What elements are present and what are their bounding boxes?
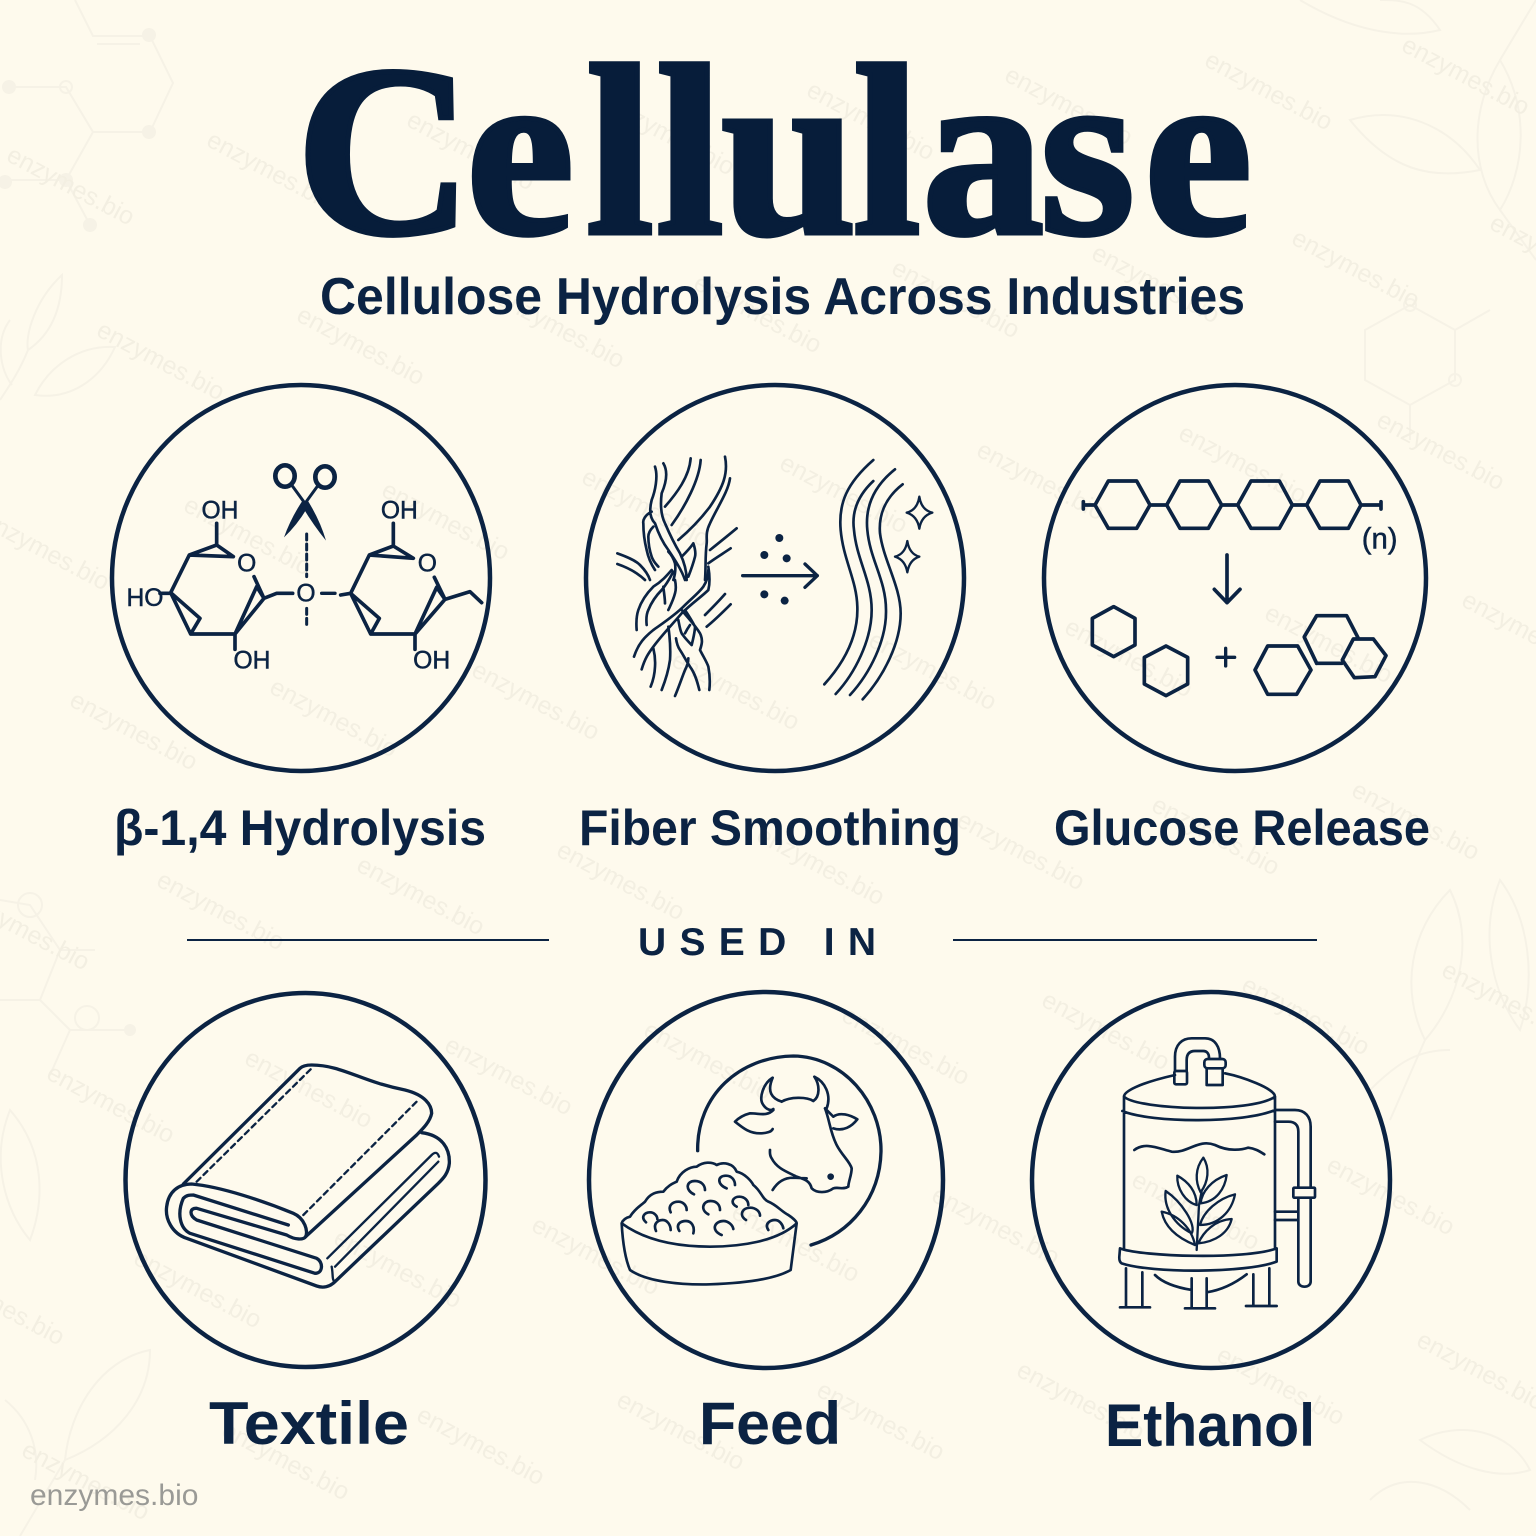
- background watermark text: enzymes.bio: [217, 1416, 354, 1506]
- label: feed: Feed: [699, 1390, 841, 1457]
- oligomer rings: [1255, 616, 1386, 694]
- panel: glucose release: [1044, 385, 1426, 771]
- background watermark text: enzymes.bio: [1000, 61, 1137, 151]
- left sugar ring: O: [237, 551, 256, 578]
- background watermark text: enzymes.bio: [1147, 791, 1284, 881]
- background watermark text: enzymes.bio: [377, 476, 514, 566]
- background watermark text: enzymes.bio: [612, 1386, 749, 1476]
- background watermark text: enzymes.bio: [1397, 31, 1534, 121]
- background watermark text: enzymes.bio: [440, 1031, 577, 1121]
- right sugar ring: O: [418, 551, 437, 578]
- background watermark text: enzymes.bio: [1174, 419, 1311, 509]
- panel: textile: [126, 993, 486, 1367]
- panel: fiber smoothing: [586, 385, 964, 771]
- background watermark text: enzymes.bio: [1012, 1356, 1149, 1446]
- background watermark text: enzymes.bio: [129, 1244, 266, 1334]
- divider: used in: USED IN: [638, 921, 876, 964]
- background watermark text: enzymes.bio: [329, 1224, 466, 1314]
- left sugar ring: OH: [202, 498, 238, 525]
- background watermark text: enzymes.bio: [602, 91, 739, 181]
- background watermark text: enzymes.bio: [92, 316, 229, 406]
- smooth fibers: [824, 460, 903, 699]
- background watermark text: enzymes.bio: [467, 656, 604, 746]
- background watermark text: enzymes.bio: [1127, 1166, 1264, 1256]
- label: beta-1,4 hydrolysis: β-1,4 Hydrolysis: [114, 800, 486, 856]
- background watermark text: enzymes.bio: [1372, 406, 1509, 496]
- background watermark text: enzymes.bio: [2, 141, 139, 231]
- right sugar ring: [341, 498, 482, 675]
- background watermark text: enzymes.bio: [1237, 971, 1374, 1061]
- background watermark text: enzymes.bio: [1347, 776, 1484, 866]
- panel: feed: [589, 992, 943, 1368]
- background watermark text: enzymes.bio: [1060, 613, 1197, 703]
- background watermark text: enzymes.bio: [1322, 1151, 1459, 1241]
- background watermark text: enzymes.bio: [639, 1016, 776, 1106]
- tank body: [1119, 1073, 1277, 1308]
- feed bowl: [622, 1163, 797, 1284]
- dashed cut line: [302, 534, 311, 628]
- background watermark text: enzymes.bio: [837, 1001, 974, 1091]
- background watermark text: enzymes.bio: [1087, 239, 1224, 329]
- top pipe and caps: [1175, 1038, 1223, 1085]
- background watermark text: enzymes.bio: [42, 1059, 179, 1149]
- liquid level: [1134, 1143, 1264, 1154]
- background watermark text: enzymes.bio: [65, 686, 202, 776]
- background watermark text: enzymes.bio: [202, 126, 339, 216]
- background watermark text: enzymes.bio: [17, 1436, 154, 1526]
- background watermark text: enzymes.bio: [864, 626, 1001, 716]
- background watermark text: enzymes.bio: [802, 76, 939, 166]
- background watermark text: enzymes.bio: [752, 821, 889, 911]
- background watermark text: enzymes.bio: [887, 254, 1024, 344]
- plant: [1162, 1158, 1235, 1250]
- circle outline: [589, 992, 943, 1368]
- icon: scissors: [275, 465, 335, 541]
- source credit: enzymes.bio: [30, 1479, 198, 1512]
- background watermark text: enzymes.bio: [689, 269, 826, 359]
- background watermark text: enzymes.bio: [972, 436, 1109, 526]
- background watermark text: enzymes.bio: [952, 806, 1089, 896]
- right sugar ring: OH: [381, 498, 418, 525]
- down arrow: [1214, 555, 1240, 603]
- icon: glycosidic bond with scissors: [127, 465, 482, 675]
- subtitle: Cellulose Hydrolysis Across Industries: [320, 268, 1245, 326]
- background watermark text: enzymes.bio: [352, 851, 489, 941]
- tangled fibers: [617, 457, 737, 696]
- background watermark text: enzymes.bio: [1287, 224, 1424, 314]
- left sugar ring: [127, 498, 293, 675]
- background watermark text: enzymes.bio: [577, 463, 714, 553]
- label: glucose release: Glucose Release: [1054, 800, 1430, 856]
- chain repeat label: (n): [1362, 522, 1398, 555]
- background watermark text: enzymes.bio: [265, 673, 402, 763]
- bridging oxygen: O: [296, 580, 316, 607]
- circle outline: [586, 385, 964, 771]
- left sugar ring: OH: [234, 648, 270, 675]
- background watermark text: enzymes.bio: [1212, 1341, 1349, 1431]
- background watermark text: enzymes.bio: [1037, 986, 1174, 1076]
- icon: polymer to glucose: [1083, 481, 1398, 696]
- background watermark text: enzymes.bio: [775, 449, 912, 539]
- arc behind cow: [698, 1056, 881, 1245]
- bridging oxygen: [296, 580, 335, 607]
- icon: fibers before and after: [617, 457, 932, 699]
- label: textile: Textile: [209, 1390, 409, 1457]
- panel: ethanol: [1032, 992, 1390, 1368]
- circle outline: [1032, 992, 1390, 1368]
- circle outline: [112, 385, 490, 771]
- arrow: [743, 564, 817, 587]
- background watermark text: enzymes.bio: [492, 284, 629, 374]
- icon: fermentation tank: [1119, 1038, 1315, 1308]
- circle outline: [126, 993, 486, 1367]
- label: fiber smoothing: Fiber Smoothing: [579, 800, 961, 856]
- plus: [1217, 648, 1235, 666]
- cow head: [735, 1077, 857, 1192]
- background watermark text: enzymes.bio: [179, 491, 316, 581]
- background watermark text: enzymes.bio: [927, 1181, 1064, 1271]
- enzyme dots: [760, 534, 791, 605]
- background watermark text: enzymes.bio: [727, 1198, 864, 1288]
- background watermark text: enzymes.bio: [1200, 46, 1337, 136]
- left sugar ring: HO: [127, 585, 163, 612]
- background watermark text: enzymes.bio: [152, 866, 289, 956]
- background watermark text: enzymes.bio: [812, 1376, 949, 1466]
- right sugar ring: OH: [413, 648, 450, 675]
- sparkles: [895, 497, 932, 572]
- glucose hexagons: [1092, 607, 1188, 696]
- side pipe: [1275, 1110, 1311, 1287]
- background watermark text: enzymes.bio: [402, 106, 539, 196]
- circle outline: [1044, 385, 1426, 771]
- title: Cellulase: [296, 16, 1252, 286]
- background watermark text: enzymes.bio: [552, 836, 689, 926]
- background watermark text: enzymes.bio: [292, 301, 429, 391]
- background watermark text: enzymes.bio: [527, 1211, 664, 1301]
- background watermark text: enzymes.bio: [667, 646, 804, 736]
- background watermark text: enzymes.bio: [412, 1401, 549, 1491]
- panel: beta-1,4 hydrolysis: [112, 385, 490, 771]
- background watermark text: enzymes.bio: [1260, 599, 1397, 689]
- icon: folded towel: [166, 1065, 449, 1287]
- label: ethanol: Ethanol: [1105, 1392, 1315, 1459]
- background watermark text: enzymes.bio: [240, 1044, 377, 1134]
- icon: cow and feed bowl: [622, 1056, 881, 1284]
- polymer chain: [1083, 481, 1381, 528]
